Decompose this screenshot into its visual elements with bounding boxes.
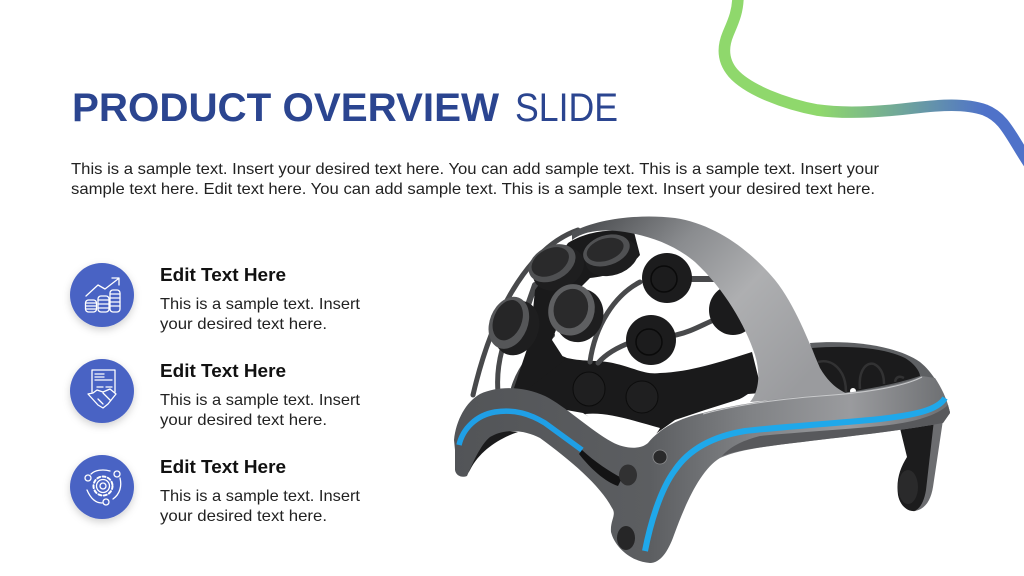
bevel highlight (703, 377, 922, 414)
screws (619, 464, 637, 486)
back band interior (810, 342, 950, 412)
left blue strip (459, 411, 582, 450)
left leg inner (455, 428, 518, 475)
item 2 heading: Edit Text Here (160, 361, 286, 381)
item 1: growth (70, 263, 361, 333)
item 1 text: your desired text here. (160, 316, 327, 333)
item 1 text (160, 296, 361, 333)
item 2 text (160, 392, 361, 429)
item 3: cycle (70, 455, 361, 525)
intro text: sample text here. Edit text here. You can add sample text. This is a sample text. Insert your desired text here. (71, 181, 875, 198)
item 2: agreement (70, 359, 361, 429)
title: SLIDE (515, 86, 618, 130)
intro text: This is a sample text. Insert your desired text here. You can add sample text. This is a sample text. Insert your (71, 161, 880, 178)
sensors (480, 227, 757, 365)
item 2 text: This is a sample text. Insert (160, 392, 361, 409)
item 1 heading: Edit Text Here (160, 265, 286, 285)
item 3 text (160, 488, 361, 525)
icon: contract and handshake (70, 359, 134, 423)
dark lower edge of right band (722, 405, 950, 456)
intro text (71, 161, 880, 198)
silver arch (572, 217, 848, 402)
dark sensor mount (514, 230, 640, 395)
frame wires (473, 230, 722, 395)
white gap under pad (585, 414, 660, 443)
title: PRODUCT OVERVIEW (72, 86, 499, 130)
right leg (897, 420, 942, 511)
main band (454, 376, 950, 563)
right blue strip (645, 398, 945, 551)
item 3 text: This is a sample text. Insert (160, 488, 361, 505)
icon: coins and rising arrow (70, 263, 134, 327)
item 3 heading: Edit Text Here (160, 457, 286, 477)
decorative gradient ribbon (724, 0, 1024, 165)
item 3 text: your desired text here. (160, 508, 327, 525)
item 2 text: your desired text here. (160, 412, 327, 429)
black slot (579, 450, 622, 486)
icon: money gear cycle (70, 455, 134, 519)
product image: EEG headset (454, 217, 950, 563)
black pad (510, 352, 762, 442)
item 1 text: This is a sample text. Insert (160, 296, 361, 313)
